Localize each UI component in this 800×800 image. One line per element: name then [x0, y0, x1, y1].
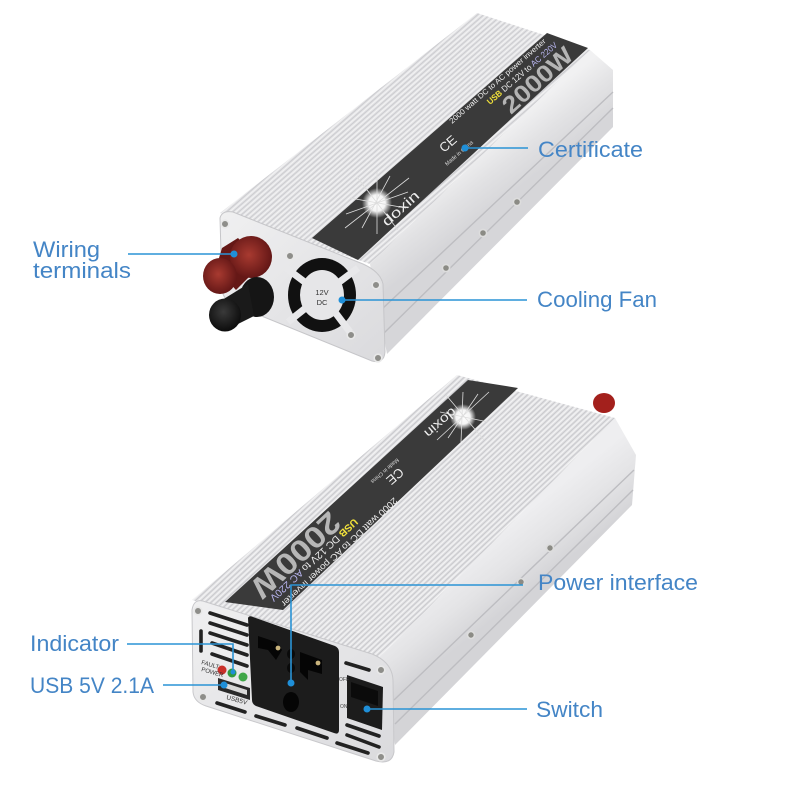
- top unit CE mark: CE: [436, 132, 460, 155]
- callout: power interface: [288, 570, 698, 686]
- callout: switch: Switch: [536, 697, 603, 722]
- top unit side groove: [381, 92, 613, 334]
- cooling fan: DC: [317, 298, 328, 307]
- top unit brand name: doxin: [378, 187, 422, 229]
- cooling fan: 12V: [315, 288, 329, 297]
- callout: indicator: Indicator: [30, 631, 119, 656]
- cooling fan: [286, 258, 358, 332]
- callout: USB: [30, 673, 228, 698]
- callout: wiring terminals: terminals: [33, 258, 131, 283]
- top unit made in china: Made in China: [444, 139, 475, 168]
- bottom unit 2000W: 2000W: [243, 505, 347, 605]
- top unit voltage line: USB DC 12V to AC 220V: [485, 40, 559, 107]
- top unit brand star: [345, 172, 409, 234]
- indicator LEDs: POWER: [200, 667, 225, 679]
- front screws: [221, 220, 382, 362]
- ventilation slots: [201, 613, 379, 753]
- inverter: bottom unit, socket end: [192, 375, 636, 762]
- bottom unit spec line: 2000 watt DC to AC power inverter: [279, 496, 399, 609]
- inverter: top unit, fan end: [203, 13, 613, 362]
- rocker switch: ON: [340, 704, 348, 710]
- indicator LEDs: [200, 660, 248, 682]
- callout: certificate: [462, 137, 643, 162]
- bottom unit CE mark: CE: [383, 465, 407, 488]
- callout: cooling fan: [338, 287, 657, 312]
- callout: cooling fan: Cooling Fan: [537, 287, 657, 312]
- callout: power interface: Power interface: [538, 570, 698, 595]
- rocker switch: [339, 675, 383, 730]
- bottom unit side groove: [394, 470, 634, 724]
- bottom unit side face: [380, 418, 636, 745]
- bottom unit voltage line: USB DC 12V to AC 220V: [267, 516, 359, 603]
- USB port: USB5V: [225, 694, 249, 707]
- USB port: [218, 678, 250, 707]
- bottom unit front panel: [192, 601, 394, 762]
- indicator LEDs: FAULT: [200, 660, 220, 671]
- callout: USB: USB 5V 2.1A: [30, 673, 154, 698]
- bottom unit brand star: [437, 392, 489, 442]
- top unit 2000W: 2000W: [497, 42, 579, 119]
- top unit front panel: [220, 212, 385, 362]
- top unit top face: [220, 13, 590, 264]
- bottom unit top face: [192, 375, 615, 657]
- top unit side face: [370, 50, 613, 354]
- top unit spec line: 2000 watt DC to AC power inverter: [447, 36, 548, 126]
- bottom unit black label strip: [225, 380, 518, 610]
- red wiring terminal: [203, 236, 272, 294]
- black wiring terminal: [209, 277, 274, 332]
- callout: indicator: [30, 631, 236, 674]
- side screws: [468, 544, 554, 638]
- far red terminal: [593, 393, 615, 413]
- top unit black label strip: [312, 33, 588, 260]
- front screws: [194, 607, 385, 761]
- side screws: [442, 198, 521, 272]
- bottom unit made in china: Made in China: [369, 456, 400, 485]
- AC socket: [248, 616, 339, 734]
- rocker switch: OFF: [339, 677, 349, 683]
- callout: switch: [364, 697, 603, 722]
- callout: certificate: Certificate: [538, 137, 643, 162]
- callout: wiring terminals: Wiring: [33, 237, 100, 262]
- bottom unit brand name: doxin: [421, 405, 460, 441]
- callout: wiring terminals: [33, 237, 238, 283]
